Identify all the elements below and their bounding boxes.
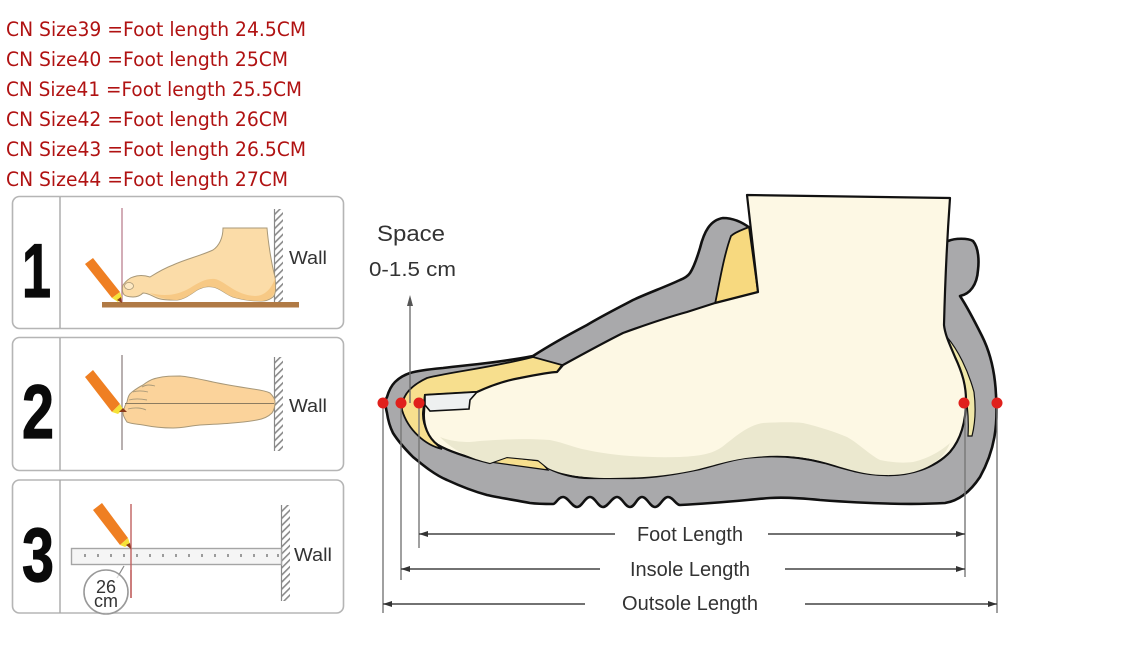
size line: 39: CN Size39 =Foot length 24.5CM [6, 18, 306, 41]
label: space: Space [377, 221, 445, 246]
foot sole shading [150, 278, 275, 301]
label: space range: 0-1.5 cm [369, 259, 456, 281]
panel: step 3 [12, 480, 344, 614]
size line: 41: CN Size41 =Foot length 25.5CM [6, 78, 302, 101]
icon: pencil [93, 503, 131, 549]
toenail [124, 282, 134, 290]
foot [424, 195, 966, 478]
icon: foot side view [122, 228, 276, 301]
dimension: insole length [401, 559, 965, 581]
callout: 26 cm: 26 [96, 577, 116, 597]
wall label: Wall [294, 544, 332, 565]
icon: pencil [85, 258, 122, 303]
red measuring dots [378, 398, 1002, 408]
size line: 42: CN Size42 =Foot length 26CM [6, 108, 288, 131]
foot sole shading [440, 422, 950, 478]
under-foot insole padding [490, 457, 548, 470]
icon: ruler [72, 548, 282, 564]
dimension: insole length: Insole Length [630, 559, 750, 581]
toe insole padding [402, 357, 562, 449]
step number 1: 1 [22, 229, 51, 314]
dimension: outsole length: Outsole Length [622, 593, 758, 615]
icon: pencil [85, 370, 127, 414]
vertical mark line [121, 355, 123, 450]
icon: wall [274, 357, 283, 451]
dimension: outsole length [383, 593, 997, 615]
callout: 26 cm [84, 566, 131, 614]
size list [6, 18, 306, 191]
wall label: Wall [289, 395, 327, 416]
vertical mark line [121, 208, 123, 302]
measurement guide lines [383, 403, 997, 613]
size line: 43: CN Size43 =Foot length 26.5CM [6, 138, 306, 161]
wall label: Wall [289, 247, 327, 268]
step number 2: 2 [22, 370, 54, 455]
size line: 40: CN Size40 =Foot length 25CM [6, 48, 288, 71]
shoe body [386, 218, 997, 507]
floor board [102, 302, 299, 308]
space arrow [407, 295, 413, 403]
shoe cross-section diagram [386, 195, 997, 507]
icon: wall [281, 505, 290, 601]
tongue padding [715, 227, 758, 304]
size line: 44: CN Size44 =Foot length 27CM [6, 168, 288, 191]
icon: wall [274, 209, 283, 302]
icon: foot top view [123, 376, 275, 428]
callout: 26 cm: cm [94, 591, 118, 611]
toenail [425, 392, 477, 411]
panel: step 2 [12, 338, 344, 470]
step number 3: 3 [22, 513, 54, 598]
vertical mark line [130, 504, 132, 598]
heel padding [947, 337, 975, 436]
dimension: foot length: Foot Length [637, 524, 743, 546]
dimension: foot length [419, 524, 965, 546]
panel: step 1 [12, 196, 344, 328]
